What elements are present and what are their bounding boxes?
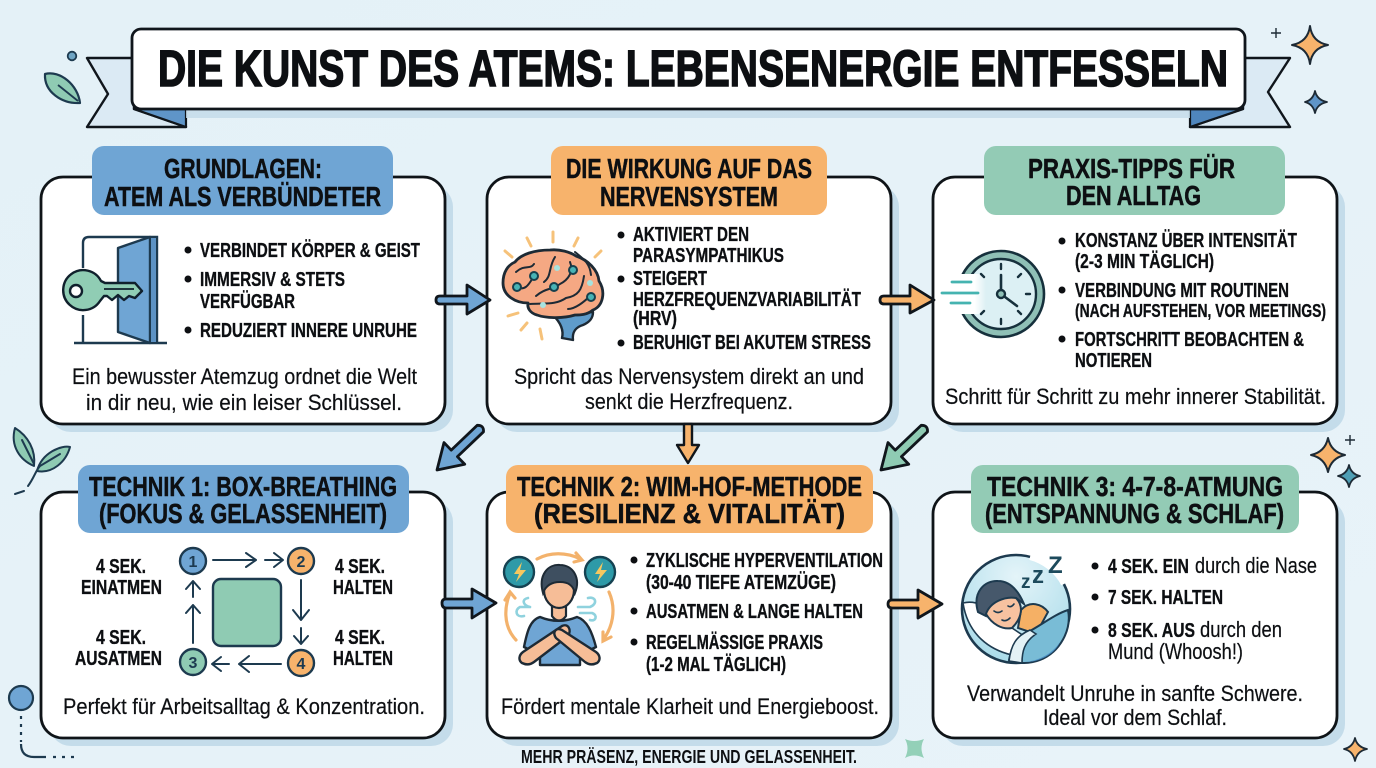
title box <box>132 29 1245 109</box>
diagram: breathing box: 4 <box>296 656 306 673</box>
decoration: top left leaf and dot <box>45 52 80 103</box>
heading: Praxis-Tipps <box>984 146 1285 215</box>
heading: Box-Breathing: (FOKUS & GELASSENHEIT) <box>99 498 387 529</box>
bullets: VERBINDUNG MIT ROUTINEN <box>1075 279 1289 302</box>
arrow: diagonal blue <box>427 416 493 481</box>
bullets: 4 SEK. EIN <box>1108 555 1189 578</box>
panel: 4-7-8 <box>933 465 1345 746</box>
bullets: VERBINDET KÖRPER & GEIST <box>200 239 420 262</box>
summary text <box>967 681 1303 730</box>
bullets: durch den <box>1200 617 1282 642</box>
heading: 4-7-8 <box>971 465 1299 533</box>
arrow: Nervensystem to Praxis <box>880 285 934 313</box>
bullets <box>1092 553 1317 664</box>
bullets: REGELMÄSSIGE PRAXIS <box>646 631 823 654</box>
summary text: senkt die Herzfrequenz. <box>585 389 793 414</box>
footer text: MEHR PRÄSENZ, ENERGIE UND GELASSENHEIT. <box>521 747 857 767</box>
arrow: Nervensystem down to Wim-Hof <box>677 424 699 463</box>
heading: 4-7-8: (ENTSPANNUNG & SCHLAF) <box>985 498 1284 529</box>
decoration: sparkles top right <box>1271 26 1328 113</box>
summary text <box>514 364 864 414</box>
heading: Nervensystem: DIE WIRKUNG AUF DAS <box>566 153 812 184</box>
bullets: (2-3 MIN TÄGLICH) <box>1075 250 1214 273</box>
bullets <box>630 549 883 676</box>
title banner <box>87 29 1290 127</box>
step labels: 4 SEK. <box>96 626 146 649</box>
ribbon: right <box>1190 58 1290 127</box>
bullets: BERUHIGT BEI AKUTEM STRESS <box>633 331 871 354</box>
step labels <box>75 555 393 670</box>
bullets: 7 SEK. HALTEN <box>1108 586 1223 609</box>
panel: Nervensystem <box>487 146 899 432</box>
bullets: PARASYMPATHIKUS <box>633 244 784 267</box>
summary text: Verwandelt Unruhe in sanfte Schwere. <box>967 681 1303 706</box>
bullets: (1-2 MAL TÄGLICH) <box>646 653 786 676</box>
bullets <box>618 223 871 354</box>
heading: Grundlagen: ATEM ALS VERBÜNDETER <box>104 181 381 212</box>
diagram: breathing box: 1 <box>188 554 198 571</box>
icon: breathing person <box>504 553 615 665</box>
bullets: 8 SEK. AUS <box>1108 619 1195 642</box>
panel: Grundlagen <box>41 146 453 432</box>
diagram: breathing box: 2 <box>296 554 306 571</box>
diagram: breathing box: 3 <box>188 655 198 672</box>
icon: sleeping person: z <box>1021 572 1030 593</box>
bullets: HERZFREQUENZVARIABILITÄT <box>633 288 861 311</box>
bullets: durch die Nase <box>1195 553 1317 578</box>
ribbon: left <box>87 58 186 127</box>
decoration: dot with dashed line <box>9 686 76 757</box>
bullets <box>184 239 420 342</box>
heading: Wim-Hof: TECHNIK 2: WIM-HOF-METHODE <box>517 471 862 502</box>
bullets: AUSATMEN & LANGE HALTEN <box>646 600 863 623</box>
heading: Wim-Hof: (RESILIENZ & VITALITÄT) <box>534 498 845 529</box>
heading: 4-7-8: TECHNIK 3: 4-7-8-ATMUNG <box>987 471 1283 502</box>
panel: Praxis-Tipps <box>933 146 1345 432</box>
bullets: AKTIVIERT DEN <box>633 223 749 246</box>
summary text: Fördert mentale Klarheit und Energieboost. <box>501 694 879 719</box>
bullets: IMMERSIV & STETS <box>200 268 345 291</box>
decoration: green star <box>905 739 924 758</box>
decoration: sparkle bottom right <box>1344 738 1367 761</box>
panel: Box-Breathing <box>41 465 453 746</box>
arrow: diagonal green <box>871 416 937 481</box>
heading: Grundlagen: GRUNDLAGEN: <box>164 153 322 184</box>
bullets: REDUZIERT INNERE UNRUHE <box>200 319 417 342</box>
arrow: Wim-Hof to 4-7-8 <box>888 590 942 618</box>
summary text: Spricht das Nervensystem direkt an und <box>514 364 864 389</box>
icon: key and door <box>63 237 167 343</box>
decoration: sparkles right middle <box>1311 435 1360 487</box>
step labels: 4 SEK. <box>96 555 146 578</box>
heading: Nervensystem: NERVENSYSTEM <box>600 181 778 212</box>
summary text <box>72 364 417 415</box>
arrow: Grundlagen to Nervensystem <box>436 285 490 314</box>
decoration: leaves left <box>14 428 70 494</box>
icon: sleeping person: Z <box>1048 552 1063 579</box>
bullets: KONSTANZ ÜBER INTENSITÄT <box>1075 229 1297 252</box>
summary text: Ideal vor dem Schlaf. <box>1043 705 1227 730</box>
step labels: HALTEN <box>333 647 393 670</box>
bullets: Mund (Whoosh!) <box>1108 639 1243 664</box>
heading: Praxis-Tipps: PRAXIS-TIPPS FÜR <box>1028 153 1235 184</box>
bullets: STEIGERT <box>633 267 707 290</box>
arrow: Box-Breathing to Wim-Hof <box>442 589 496 618</box>
icon: sleeping person <box>962 552 1070 663</box>
diagram: breathing box <box>180 548 314 676</box>
step labels: 4 SEK. <box>335 626 385 649</box>
bullets: (30-40 TIEFE ATEMZÜGE) <box>646 571 836 594</box>
heading: Box-Breathing: TECHNIK 1: BOX-BREATHING <box>89 471 397 502</box>
step labels: AUSATMEN <box>75 647 162 670</box>
summary text: Ein bewusster Atemzug ordnet die Welt <box>72 364 417 389</box>
bullets: NOTIEREN <box>1075 349 1152 372</box>
summary text: Perfekt für Arbeitsalltag & Konzentration. <box>63 694 425 719</box>
icon: brain <box>503 232 603 340</box>
heading: Box-Breathing <box>78 465 409 533</box>
bullets: VERFÜGBAR <box>200 290 295 313</box>
icon: sleeping person: z <box>1032 562 1044 589</box>
bullets <box>1058 229 1326 372</box>
step labels: 4 SEK. <box>335 555 385 578</box>
icon: clock <box>942 251 1044 337</box>
heading: Grundlagen <box>92 146 393 215</box>
heading: Wim-Hof <box>506 465 873 533</box>
step labels: EINATMEN <box>81 576 162 599</box>
step labels: HALTEN <box>333 576 393 599</box>
bullets: (HRV) <box>633 307 677 330</box>
heading: Nervensystem <box>551 146 827 215</box>
panel: Wim-Hof <box>487 465 899 746</box>
heading: Praxis-Tipps: DEN ALLTAG <box>1066 180 1201 211</box>
summary text: Schritt für Schritt zu mehr innerer Stabilität. <box>945 384 1326 409</box>
bullets: ZYKLISCHE HYPERVENTILATION <box>646 549 883 572</box>
summary text: in dir neu, wie ein leiser Schlüssel. <box>86 390 402 415</box>
